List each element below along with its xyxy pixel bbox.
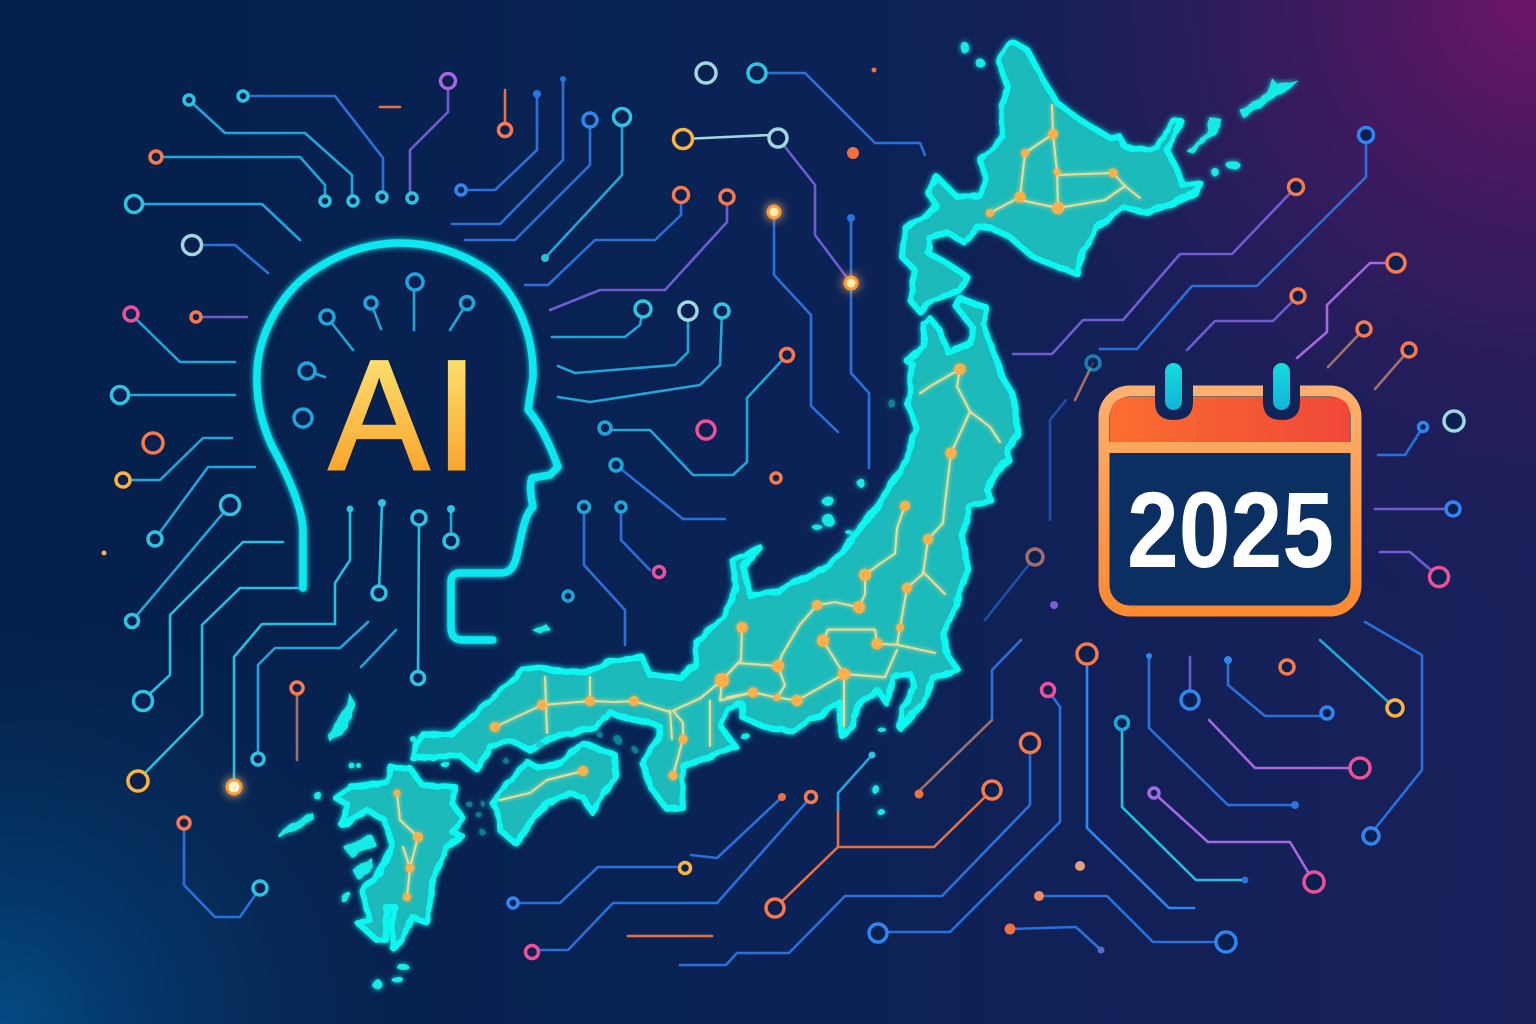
circuit lines: lower right: [680, 601, 1422, 965]
small islands: [278, 42, 1298, 989]
calendar body: [1104, 391, 1356, 611]
year text: 2025: [1127, 469, 1334, 590]
Shikoku: [492, 743, 615, 843]
map of Japan: [278, 42, 1298, 989]
brain nodes: [294, 274, 474, 427]
Honshu: [413, 298, 1018, 809]
calendar ring right: [1263, 363, 1300, 420]
circuit lines: upper left: [126, 74, 630, 273]
calendar ring left: [1155, 363, 1193, 420]
Kyushu: [335, 768, 463, 948]
circuit lines: left side: [102, 307, 458, 917]
calendar header: [1110, 397, 1350, 442]
circuit lines: right side: [985, 128, 1464, 620]
Honshu routes: [668, 363, 1000, 780]
AI text: A: [329, 329, 429, 503]
head profile: [257, 243, 558, 640]
AI text: [329, 329, 478, 503]
circuit lines: centre: [525, 63, 925, 645]
head outline with AI: [257, 243, 558, 640]
Japan network routes: [394, 105, 1140, 901]
circuit lines: lower centre: [508, 792, 816, 958]
AI text: I: [435, 329, 478, 503]
western routes: [394, 677, 670, 901]
Hokkaido: [902, 42, 1200, 312]
calendar 2025: [1104, 363, 1356, 611]
Hokkaido routes: [986, 105, 1140, 217]
